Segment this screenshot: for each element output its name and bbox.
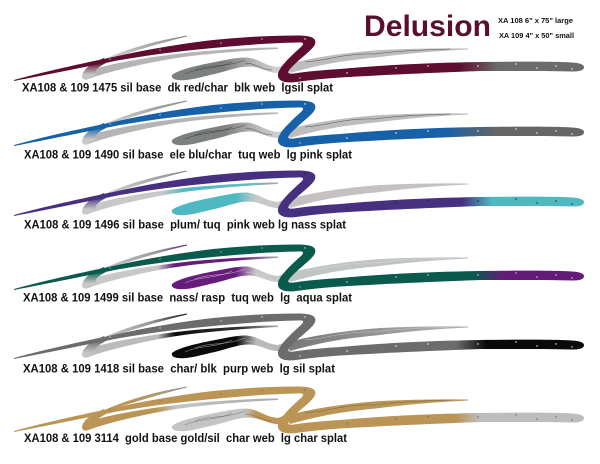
decal 1475 dark red: [14, 36, 584, 82]
decal 1499 green: [14, 244, 584, 291]
label 1496: XA108 & 109 1496 sil base plum/ tuq pink web lg nass splat: [24, 220, 346, 232]
decal 1418 charcoal: [14, 314, 584, 360]
label 3114: XA108 & 109 3114 gold base gold/sil char web lg char splat: [24, 433, 347, 445]
title: Delusion: [364, 10, 491, 43]
decal 3114 gold: [14, 386, 584, 433]
label 1499: XA108 & 109 1499 sil base nass/ rasp tuq web lg aqua splat: [23, 292, 352, 304]
label 1490: XA108 & 109 1490 sil base ele blu/char tuq web lg pink splat: [24, 150, 352, 162]
size note: large: XA 108 6" x 75" large: [498, 18, 573, 25]
decal 1490 blue: [14, 100, 584, 147]
label 1475: XA108 & 109 1475 sil base dk red/char blk web lgsil splat: [22, 82, 333, 94]
label 1418: XA108 & 109 1418 sil base char/ blk purp web lg sil splat: [23, 364, 335, 376]
size note: small: XA 109 4" x 50" small: [499, 33, 574, 40]
decal 1496 plum: [14, 170, 584, 217]
